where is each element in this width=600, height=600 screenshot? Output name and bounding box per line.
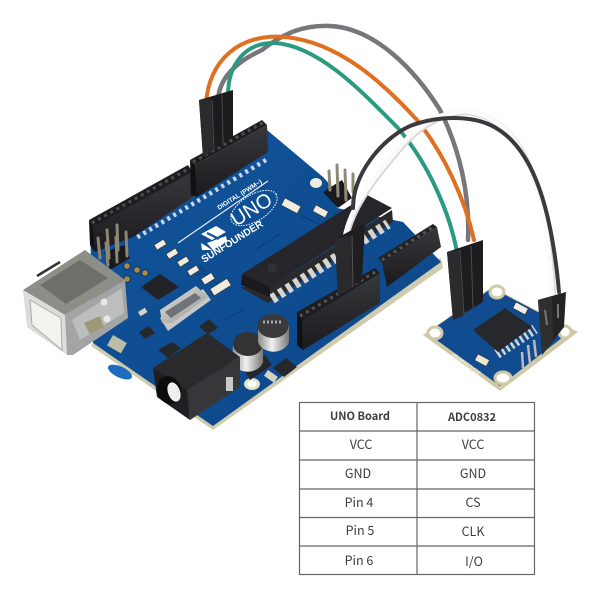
digital label: DIGITAL (PWM~): [216, 179, 263, 212]
row VCC: VCC: [462, 434, 484, 453]
solder marks: [107, 308, 278, 383]
row Pin 4: Pin 4: [345, 492, 373, 511]
jumper wires: [206, 26, 559, 295]
row VCC: [350, 434, 484, 453]
LEDs: [154, 198, 328, 296]
green wire: [228, 43, 457, 252]
orange wire: [206, 37, 474, 240]
back headers: [89, 120, 268, 252]
module holes: [428, 286, 571, 384]
row Pin 5: [346, 520, 485, 540]
dupont connector: digital pins: [199, 90, 233, 157]
row Pin 5: Pin 5: [346, 520, 374, 539]
module edge: [423, 287, 578, 391]
mounting hole: [310, 178, 322, 188]
male pins: [522, 340, 536, 368]
small ICs: [139, 319, 297, 380]
pcb edge: [91, 258, 443, 430]
dupont connector: ADC left: [447, 240, 483, 320]
row GND: GND: [460, 463, 486, 482]
white wire: [345, 111, 552, 295]
row Pin 4: CS: [465, 492, 481, 511]
module chip: [473, 308, 535, 354]
row Pin 5: CLK: [462, 521, 485, 540]
gold pads: [124, 262, 148, 282]
table header: ADC0832: [447, 409, 496, 425]
blue reflection: [106, 362, 134, 382]
dupont connector: ADC right: [538, 292, 566, 355]
right headers: [297, 224, 441, 350]
row VCC: VCC: [350, 434, 372, 453]
row Pin 4: [345, 492, 481, 511]
crystal: [160, 286, 211, 331]
row Pin 6: I/O: [465, 551, 483, 570]
module silk text: AD-Converter: [451, 351, 482, 375]
table grid: [300, 402, 534, 574]
ADC0832 module: [423, 286, 578, 391]
Arduino UNO board: [23, 120, 443, 430]
dupont connector: power pins: [335, 223, 365, 296]
black wire: [353, 118, 559, 292]
table header: UNO Board: [330, 408, 390, 424]
module pcb: [427, 288, 572, 386]
ICSP pins right: [323, 165, 353, 208]
row GND: [345, 463, 486, 482]
row Pin 6: [345, 550, 483, 570]
connection table: [300, 402, 534, 574]
module parts: [475, 354, 489, 366]
USB connector: [23, 250, 128, 355]
ICSP pins left: [98, 225, 130, 270]
silk line and pin labels: [136, 160, 268, 243]
row Pin 6: Pin 6: [345, 550, 373, 569]
row GND: GND: [345, 463, 371, 482]
SunFounder logo: SUNFOUNDER: [200, 218, 266, 266]
capacitors: [232, 314, 289, 372]
gray wire: [218, 26, 468, 240]
power jack: [153, 333, 240, 420]
USB controller chip: [141, 274, 179, 300]
white wire shadow: [346, 112, 553, 295]
UNO logo: UNO: [227, 189, 276, 231]
pcb traces and vias: [190, 215, 320, 320]
pcb: [90, 130, 441, 426]
table header: [330, 408, 496, 425]
ATmega chip: [240, 195, 393, 303]
